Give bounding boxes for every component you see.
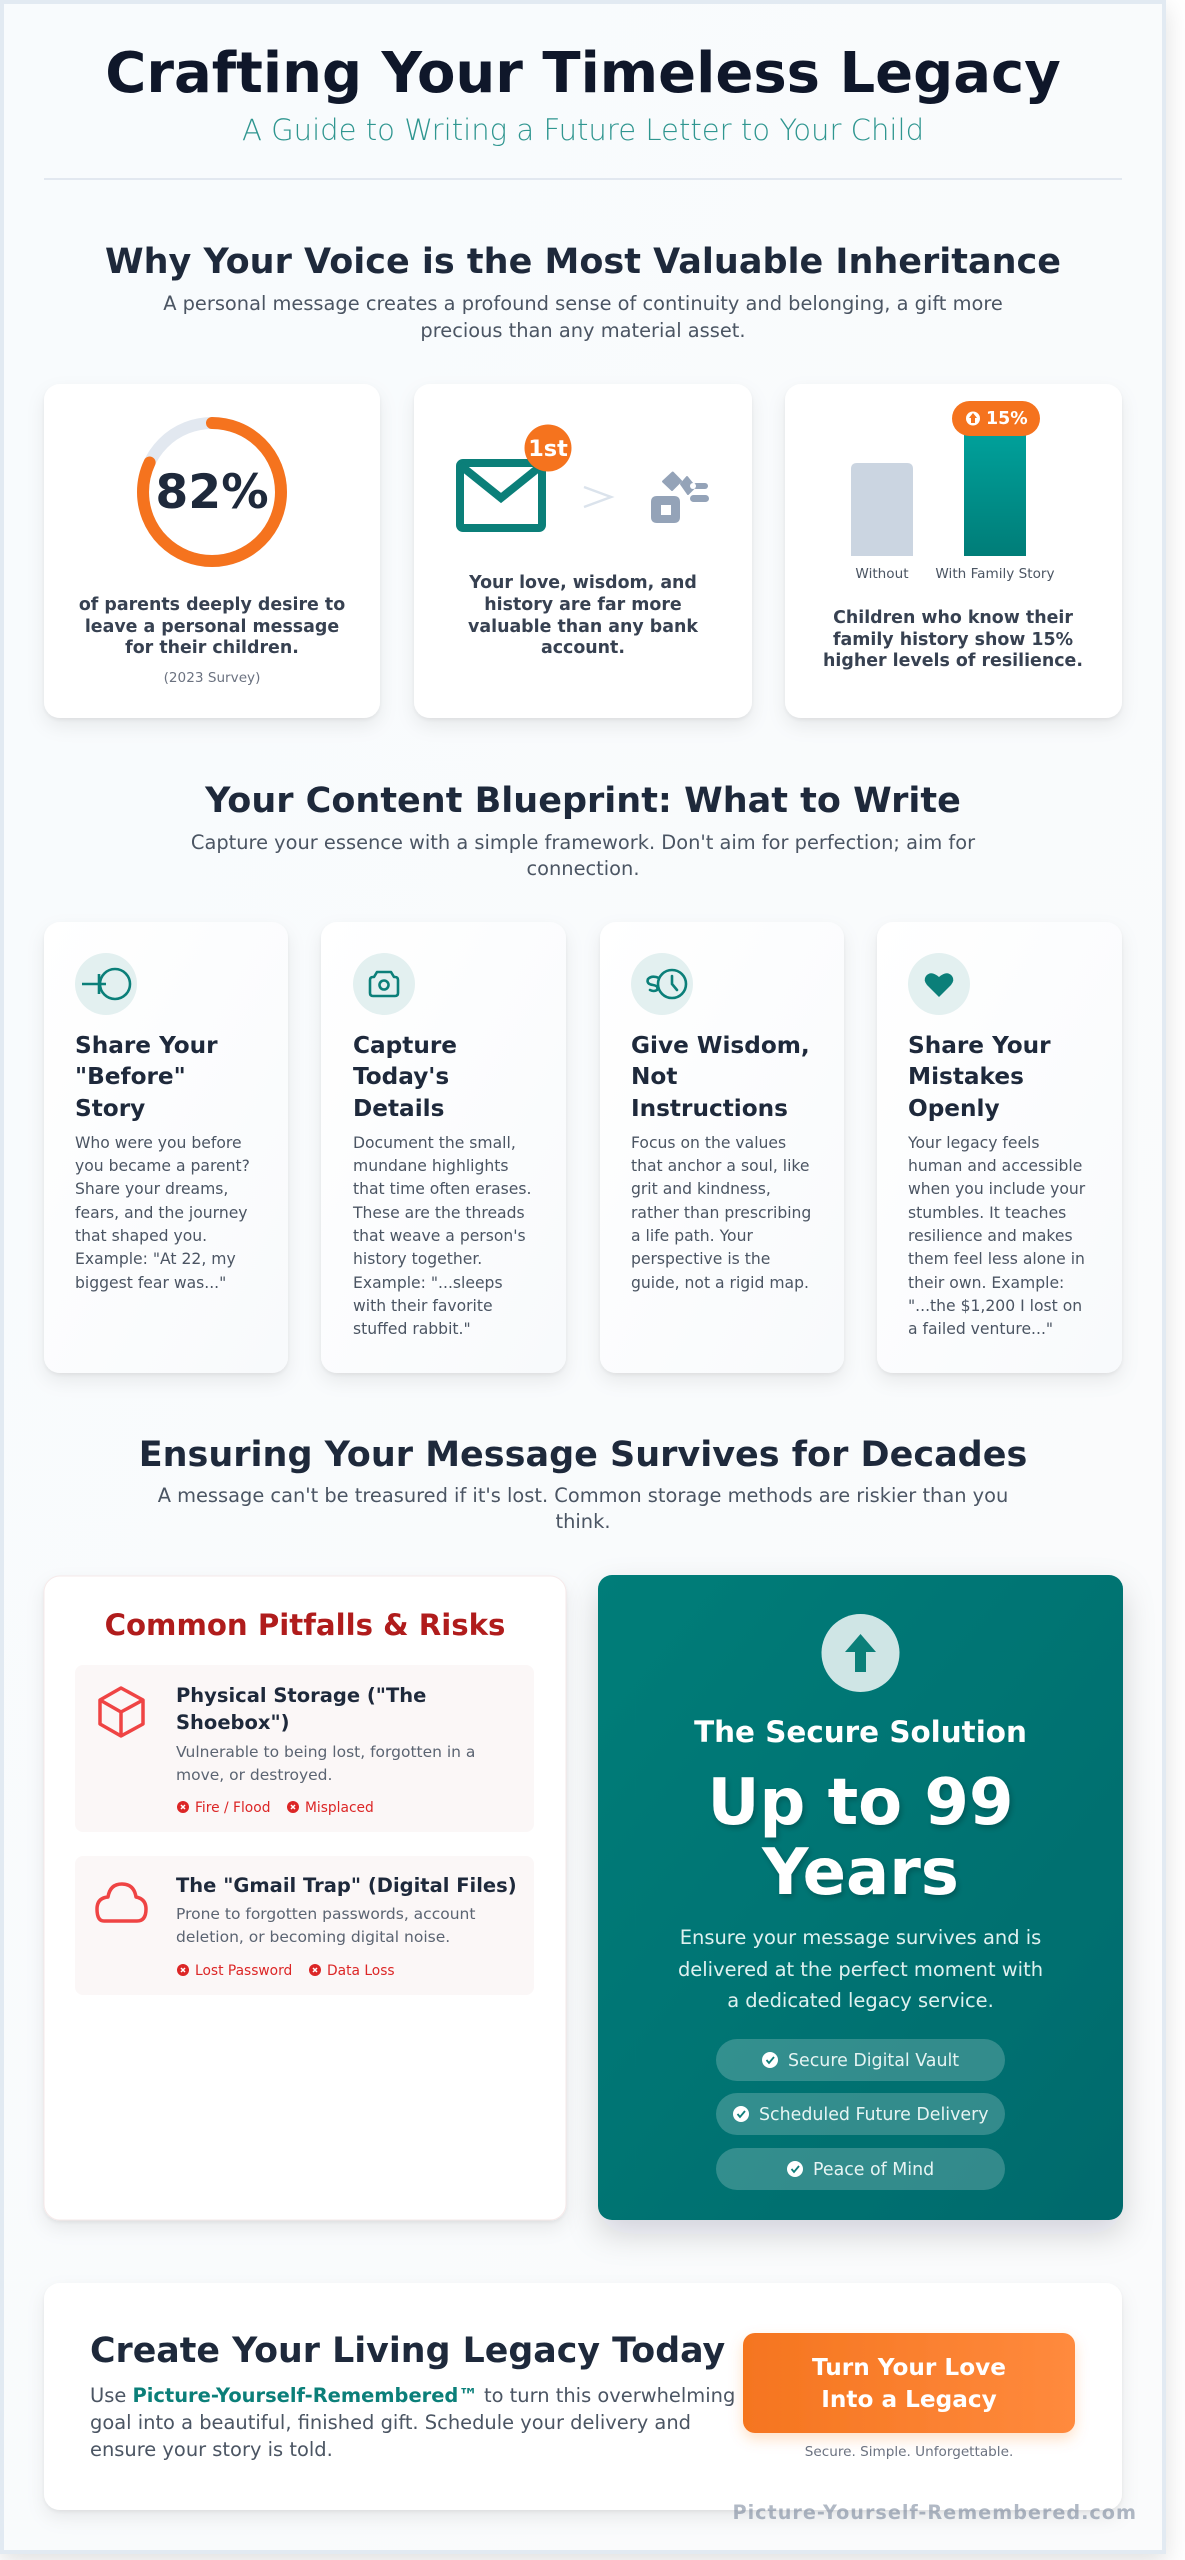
cta text: ensure your story is told.	[90, 2438, 333, 2461]
card text: that weave a person's	[353, 1227, 526, 1245]
pitfall title: Shoebox")	[176, 1711, 290, 1734]
header	[105, 41, 1061, 147]
section heading: Ensuring Your Message Survives for Decades	[139, 1435, 1027, 1475]
watermark: Picture-Yourself-Remembered.com	[733, 2501, 1137, 2524]
cta heading: Create Your Living Legacy Today	[90, 2331, 726, 2371]
icon: clock and dollar	[631, 953, 693, 1015]
card: today's details	[321, 922, 566, 1373]
card heading: Today's	[353, 1063, 449, 1090]
card text: perspective is the	[631, 1250, 770, 1268]
card heading: Share Your	[75, 1032, 218, 1059]
panel: secure solution	[598, 1575, 1123, 2220]
card text: that shaped you.	[75, 1227, 207, 1245]
card heading: Share Your	[908, 1032, 1051, 1059]
pill: scheduled delivery: Scheduled Future Delivery	[759, 2105, 989, 2125]
risk tag: misplaced: Misplaced	[305, 1800, 374, 1816]
card text: guide, not a rigid map.	[631, 1274, 809, 1292]
stat description: of parents deeply desire to	[79, 595, 345, 615]
source note: (2023 Survey)	[164, 670, 260, 686]
icon: up arrow	[822, 1614, 900, 1692]
card text: stuffed rabbit."	[353, 1320, 471, 1338]
card text: "...the $1,200 I lost on	[908, 1297, 1082, 1315]
badge: 15 percent: 15%	[986, 409, 1028, 429]
card: mistakes	[877, 922, 1122, 1373]
pill: secure vault: Secure Digital Vault	[788, 2051, 959, 2071]
pill: peace of mind	[716, 2148, 1005, 2190]
card text: human and accessible	[908, 1157, 1082, 1175]
section heading: Why Your Voice is the Most Valuable Inheritance	[105, 242, 1061, 282]
pill: peace of mind: Peace of Mind	[813, 2160, 934, 2180]
first badge	[524, 424, 572, 472]
card text: Your love, wisdom, and	[468, 573, 697, 593]
pitfall description: move, or destroyed.	[176, 1766, 332, 1784]
card text: that time often erases.	[353, 1180, 531, 1198]
big stat: Years	[761, 1836, 959, 1910]
card text: history together.	[353, 1250, 482, 1268]
stat card: resilience bar chart	[785, 384, 1122, 718]
panel: call to action	[44, 2283, 1122, 2510]
card heading: Instructions	[631, 1095, 788, 1122]
pill: scheduled delivery	[716, 2093, 1005, 2135]
card text: rather than prescribing	[631, 1204, 811, 1222]
icon: assets	[651, 472, 709, 523]
cta text: Picture-Yourself-Remembered™ to turn this overwhelming	[132, 2384, 735, 2407]
card text: higher levels of resilience.	[823, 651, 1083, 671]
card text: grit and kindness,	[631, 1180, 771, 1198]
card text: that anchor a soul, like	[631, 1157, 809, 1175]
stat card: love vs money	[414, 384, 752, 718]
card text: These are the threads	[352, 1204, 525, 1222]
cta note: Secure. Simple. Unforgettable.	[805, 2444, 1013, 2460]
card text: fears, and the journey	[75, 1204, 248, 1222]
card: before story	[44, 922, 288, 1373]
card text: stumbles. It teaches	[908, 1204, 1066, 1222]
stat description: leave a personal message	[85, 617, 339, 637]
section intro text: connection.	[526, 857, 640, 880]
cta button: Into a Legacy	[821, 2386, 997, 2413]
card text: account.	[541, 638, 625, 658]
big stat: Up to 99	[708, 1766, 1013, 1840]
risk tag: fire flood: Fire / Flood	[195, 1800, 270, 1816]
icon: heart	[908, 953, 970, 1015]
icon: camera	[353, 953, 415, 1015]
pitfall: physical storage	[75, 1665, 534, 1832]
card text: Example: "...sleeps	[353, 1274, 503, 1292]
section intro text: A personal message creates a profound sense of continuity and belonging, a gift more	[163, 292, 1003, 315]
card text: Focus on the values	[631, 1134, 786, 1152]
card text: a life path. Your	[631, 1227, 753, 1245]
card text: biggest fear was..."	[75, 1274, 226, 1292]
panel heading: The Secure Solution	[694, 1715, 1027, 1749]
section: content blueprint	[44, 781, 1122, 1373]
card text: Document the small,	[353, 1134, 516, 1152]
panel text: delivered at the perfect moment with	[678, 1958, 1043, 1981]
card heading: Story	[75, 1095, 145, 1122]
panel text: Ensure your message survives and is	[680, 1926, 1041, 1949]
pitfall title: The "Gmail Trap" (Digital Files)	[176, 1874, 517, 1897]
card heading: Mistakes	[908, 1063, 1024, 1090]
card text: Children who know their	[833, 608, 1073, 628]
cta button	[743, 2333, 1075, 2433]
card text: with their favorite	[353, 1297, 493, 1315]
pitfall description: Vulnerable to being lost, forgotten in a	[176, 1743, 475, 1761]
card text: a failed venture..."	[908, 1320, 1053, 1338]
panel heading: Common Pitfalls & Risks	[105, 1608, 505, 1642]
badge: 15 percent	[952, 401, 1040, 436]
greater-than sign	[584, 487, 611, 507]
card text: Example: "At 22, my	[75, 1250, 236, 1268]
bar chart	[851, 432, 1055, 582]
section: why your voice	[44, 242, 1122, 718]
pill: secure vault	[716, 2039, 1005, 2081]
donut chart: 82%	[155, 465, 269, 520]
card text: family history show 15%	[833, 630, 1073, 650]
cta text: goal into a beautiful, finished gift. Schedule your delivery and	[90, 2411, 691, 2434]
bar chart: With Family Story	[935, 566, 1055, 582]
section: message survival	[44, 1435, 1123, 2220]
cta button: Turn Your Love	[812, 2354, 1006, 2381]
bar chart: Without	[855, 566, 909, 582]
stat description: for their children.	[125, 638, 299, 658]
card: wisdom	[600, 922, 844, 1373]
card text: their own. Example:	[908, 1274, 1064, 1292]
section heading: Your Content Blueprint: What to Write	[204, 781, 961, 821]
panel text: a dedicated legacy service.	[727, 1989, 994, 2012]
donut chart	[143, 423, 281, 561]
pitfall description: deletion, or becoming digital noise.	[176, 1928, 450, 1946]
card text: mundane highlights	[353, 1157, 509, 1175]
subtitle: A Guide to Writing a Future Letter to Your Child	[242, 113, 924, 147]
card text: Your legacy feels	[907, 1134, 1040, 1152]
section intro text: think.	[556, 1510, 610, 1533]
card text: resilience and makes	[908, 1227, 1073, 1245]
card heading: Openly	[908, 1095, 1000, 1122]
title: Crafting Your Timeless Legacy	[105, 41, 1061, 106]
icon: envelope	[460, 463, 542, 528]
icon: cloud	[97, 1884, 146, 1921]
card heading: Capture	[353, 1032, 457, 1059]
icon: box	[100, 1688, 143, 1736]
first badge: 1st	[528, 436, 568, 462]
panel: common pitfalls	[44, 1576, 566, 2220]
section intro text: precious than any material asset.	[420, 319, 746, 342]
card text: history are far more	[484, 595, 682, 615]
card heading: Details	[353, 1095, 444, 1122]
card heading: "Before"	[75, 1063, 186, 1090]
risk tag: lost password: Lost Password	[195, 1963, 292, 1979]
section intro text: Capture your essence with a simple framework. Don't aim for perfection; aim for	[191, 831, 975, 854]
icon: plus circle	[75, 953, 137, 1015]
pitfall description: Prone to forgotten passwords, account	[176, 1905, 475, 1923]
section intro text: A message can't be treasured if it's lost. Common storage methods are riskier than you	[158, 1484, 1008, 1507]
pitfall: gmail trap	[75, 1856, 534, 1995]
card heading: Give Wisdom,	[631, 1032, 810, 1059]
card text: when you include your	[908, 1180, 1086, 1198]
card text: Who were you before	[75, 1134, 242, 1152]
cta text: Use	[90, 2384, 132, 2407]
stat card: 82 percent	[44, 384, 380, 718]
risk tag: data loss: Data Loss	[327, 1963, 395, 1979]
card text: Share your dreams,	[75, 1180, 228, 1198]
card heading: Not	[631, 1063, 677, 1090]
card text: you became a parent?	[75, 1157, 250, 1175]
card text: them feel less alone in	[908, 1250, 1085, 1268]
pitfall title: Physical Storage ("The	[176, 1684, 426, 1707]
card text: valuable than any bank	[468, 617, 698, 637]
